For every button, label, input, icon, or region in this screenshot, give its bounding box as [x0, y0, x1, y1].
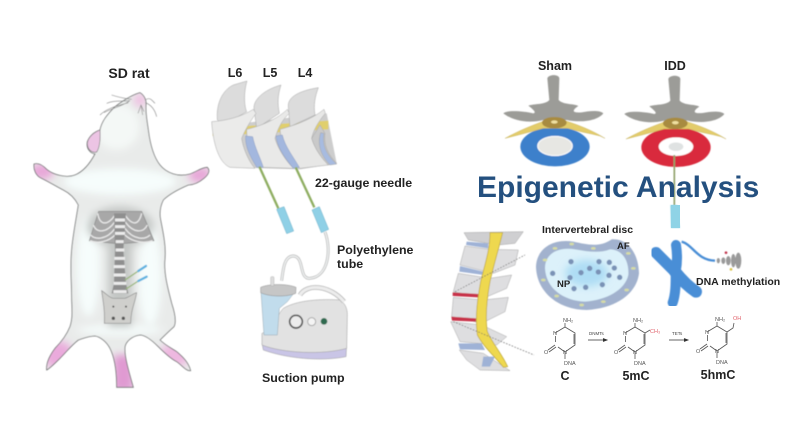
label: 22-gauge needle: 22-gauge needle	[315, 176, 412, 190]
heading: Sham: Sham	[538, 59, 572, 73]
icon: rat whiskers and mouth	[100, 95, 157, 117]
pump base	[262, 343, 347, 359]
nucleosome beads	[717, 253, 741, 269]
chemical structure: 5mC: N	[633, 350, 637, 356]
heading: Intervertebral disc: Intervertebral disc	[542, 224, 633, 236]
chromosome illustration	[656, 242, 741, 303]
polyethylene tube	[282, 232, 328, 281]
label: C: C	[560, 369, 570, 383]
chromosome arms	[656, 245, 696, 303]
chemical structure: cytosine: NH₂	[563, 318, 573, 324]
spinal cord	[476, 233, 508, 367]
blue discs	[458, 242, 495, 367]
suction pump	[261, 277, 347, 359]
chemical structure: 5mC: DNA	[634, 361, 646, 367]
icon: rat ear	[87, 130, 100, 152]
lid port	[271, 277, 274, 286]
intervertebral disc illustration	[536, 239, 639, 310]
chemical structure: cytosine	[544, 318, 576, 367]
lumbar vertebrae	[212, 81, 347, 359]
pump handle	[300, 287, 344, 302]
DNA strand	[682, 242, 715, 261]
vertebra L4	[280, 88, 337, 168]
needle hub	[671, 205, 680, 228]
rat body	[30, 93, 211, 392]
injection needle	[670, 155, 680, 228]
chemical structure: 5mC: O	[614, 350, 619, 356]
label: NP: NP	[557, 279, 571, 290]
sham and IDD vertebra illustrations	[503, 75, 726, 228]
chemical structure: 5mC: N	[623, 331, 627, 337]
label: L5: L5	[263, 66, 277, 80]
spine column	[112, 213, 128, 293]
vertebra back silhouette	[213, 113, 337, 169]
vertebra L5	[247, 85, 293, 168]
nucleus pulposus	[545, 249, 628, 302]
arrow: TETs	[669, 331, 688, 342]
idd vertebra	[624, 76, 726, 139]
chemical structure: 5hmC: O	[696, 349, 701, 355]
pressure gauge	[290, 315, 302, 328]
label: polyethylene tube: Polyethylene	[337, 243, 414, 257]
label: DNA methylation: DNA methylation	[696, 276, 780, 288]
title: Epigenetic Analysis: Epigenetic Analysis	[477, 171, 759, 204]
dashed guide lines	[453, 255, 534, 355]
heading: IDD: IDD	[664, 59, 686, 73]
methyl marks	[725, 251, 732, 271]
sham disc	[520, 127, 590, 166]
heading: SD rat: SD rat	[108, 65, 150, 81]
damaged red discs	[451, 292, 478, 322]
pelvis	[102, 291, 137, 323]
sham vertebra	[503, 75, 605, 138]
arrow: TETs: TETs	[672, 331, 683, 336]
blue discs	[246, 135, 299, 168]
arrow: DNMTs	[588, 331, 607, 342]
panel: needle puncture and suction	[212, 66, 414, 385]
label: polyethylene tube: tube	[337, 257, 363, 271]
rib cage	[89, 211, 154, 243]
power light	[321, 318, 327, 325]
panel: Sham and IDD discs	[477, 59, 759, 228]
NP cells	[550, 259, 622, 291]
annulus fibrosus	[536, 239, 639, 310]
label: suction pump: Suction pump	[262, 371, 345, 385]
chemical structure: 5hmC: N	[705, 330, 709, 336]
chemical structure: 5hmC: NH₂	[715, 317, 725, 323]
pump body	[262, 300, 347, 352]
label: 5hmC: 5hmC	[701, 368, 735, 382]
chemical structure: 5mC: CH₃	[650, 329, 660, 335]
vertebra L6	[212, 81, 256, 168]
mini needles	[125, 266, 147, 289]
label: 5mC: 5mC	[622, 369, 650, 383]
collection canister	[261, 292, 295, 335]
label: L4: L4	[298, 66, 312, 80]
chemical structure: cytosine: DNA	[564, 361, 576, 367]
chemical structure: cytosine: O	[544, 350, 549, 356]
green needle shafts	[259, 167, 314, 208]
spinal cord strip	[213, 121, 328, 136]
needle hubs	[277, 207, 329, 234]
chemical structure: 5mC: NH₂	[633, 318, 643, 324]
spine illustration	[451, 232, 534, 371]
chemical structure: 5hmC	[696, 316, 741, 366]
chemical structure: 5hmC: OH	[733, 316, 741, 322]
pelvis holes	[112, 306, 127, 320]
chemical structure: 5hmC: DNA	[716, 360, 728, 366]
panel: SD rat	[30, 65, 211, 392]
canister lid	[261, 285, 296, 296]
skeleton	[87, 207, 154, 327]
control knob	[308, 318, 316, 326]
panel: spine and molecular detail	[451, 205, 780, 383]
chemical structure: 5mC	[614, 318, 660, 367]
chemical structure: 5hmC: N	[715, 349, 719, 355]
label: AF: AF	[617, 241, 630, 252]
AF cells	[541, 243, 636, 306]
label: L6: L6	[228, 66, 242, 80]
chemical structure: cytosine: N	[553, 331, 557, 337]
vertebra segments	[113, 220, 127, 308]
arrow: DNMTs: DNMTs	[589, 331, 604, 336]
rat illustration	[30, 93, 211, 392]
idd disc	[641, 128, 711, 167]
chemical structure: cytosine: N	[563, 350, 567, 356]
vertebra bodies	[451, 232, 523, 371]
